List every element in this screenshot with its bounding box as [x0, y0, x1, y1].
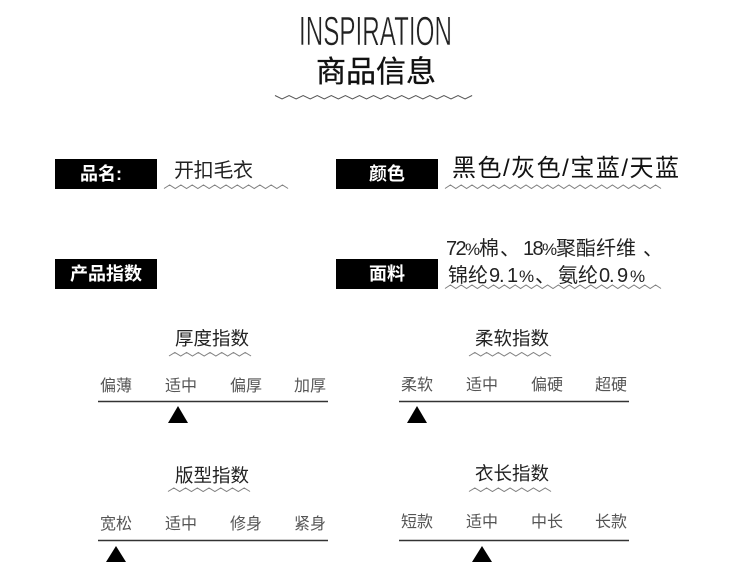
- scale labels: 柔软: [401, 376, 433, 394]
- scale line: [98, 540, 328, 542]
- heading: 商品信息: 商品信息: [316, 56, 436, 89]
- scale labels: 偏硬: [531, 376, 563, 394]
- wavy underline: fabric: [445, 285, 661, 288]
- wavy underline: thickness: [169, 352, 251, 356]
- title wavy underline: [275, 96, 472, 99]
- panel: product name: [55, 159, 288, 189]
- marker: 宽松: [106, 546, 126, 562]
- wavy underline: fit: [168, 488, 250, 492]
- label: 面料: 面料: [369, 264, 405, 284]
- scale labels: 适中: [466, 376, 498, 394]
- wavy underline: softness: [469, 352, 551, 356]
- label: 品名: [55, 159, 157, 189]
- value: fabric line 1: 7: [446, 238, 457, 260]
- scale labels: 长款: [595, 513, 627, 531]
- scale labels: 超硬: [595, 376, 627, 394]
- scale: length: [399, 463, 629, 562]
- value: colour list: 黑色/灰色/宝蓝/天蓝: [452, 155, 679, 182]
- value: fabric line 2: 9: [617, 265, 628, 287]
- value: fabric line 2: 0: [599, 265, 610, 287]
- value: fabric line 1: 8: [532, 238, 544, 260]
- scale line: [399, 400, 629, 402]
- value: fabric line 2: 纶: [578, 264, 598, 287]
- scale labels: 短款: [401, 513, 433, 531]
- panel: colours: [336, 155, 679, 189]
- value: fabric line 2: .: [499, 265, 505, 287]
- marker: 柔软: [407, 406, 427, 423]
- heading: 柔软指数: 柔软指数: [475, 328, 549, 349]
- marker: 适中: [472, 546, 492, 562]
- scale labels: 适中: [165, 515, 197, 533]
- label: 产品指数: 产品指数: [70, 263, 142, 284]
- value: fabric line 1: 棉: [479, 237, 499, 260]
- scale labels: 紧身: [294, 515, 326, 533]
- value: fabric line 1: 2: [456, 238, 467, 260]
- value: fabric line 1: 聚: [556, 238, 576, 260]
- scale labels: 修身: [230, 515, 262, 533]
- value: fabric line 2: 、: [535, 265, 555, 287]
- label: 颜色: 颜色: [369, 164, 405, 184]
- scale: softness: [399, 328, 629, 423]
- scale labels: [100, 377, 326, 395]
- value: fabric line 2: 纶: [468, 264, 488, 287]
- wavy underline: length: [469, 488, 551, 492]
- scale labels: 宽松: [100, 515, 132, 533]
- panel: fabric: [336, 237, 663, 289]
- value: fabric line 2: %: [630, 267, 645, 286]
- heading: 厚度指数: 厚度指数: [175, 328, 249, 349]
- value: fabric line 2: 9: [489, 265, 500, 287]
- marker: 适中: [168, 406, 188, 423]
- label: 颜色: [336, 159, 438, 189]
- heading: 衣长指数: 衣长指数: [475, 463, 549, 484]
- scale line: [399, 540, 629, 542]
- scale labels: 适中: [466, 513, 498, 531]
- wavy underline: colours: [445, 185, 661, 188]
- wavy underline: name: [164, 185, 288, 188]
- scale line: [98, 400, 328, 402]
- value: fabric line 1: 酯: [576, 238, 596, 260]
- scale labels: [401, 376, 627, 394]
- value: fabric line 1: 、: [500, 238, 520, 260]
- value: fabric line 2: 锦: [448, 264, 468, 287]
- value: fabric line 2: 1: [507, 265, 518, 287]
- value: fabric line 2: .: [609, 265, 615, 287]
- label: 品名: 品名:: [80, 164, 122, 184]
- scale labels: [401, 513, 627, 531]
- value: fabric line 2: 氨: [558, 264, 578, 287]
- scale: fit: [98, 465, 328, 562]
- value: fabric line 1: 、: [643, 238, 663, 260]
- label: 产品指数: [55, 259, 157, 289]
- value: fabric line 1: %: [542, 240, 557, 259]
- scale labels: 偏薄: [100, 377, 132, 395]
- value: fabric line 1: 纤: [596, 237, 616, 260]
- value: fabric line 1: 1: [523, 238, 534, 260]
- title: INSPIRATION: INSPIRATION: [299, 8, 452, 54]
- value: 开扣毛衣: 开扣毛衣: [174, 159, 253, 182]
- scale labels: 加厚: [294, 377, 326, 395]
- scale labels: [100, 515, 326, 533]
- heading: 版型指数: 版型指数: [175, 465, 249, 486]
- scale labels: 偏厚: [230, 377, 262, 395]
- label: 面料: [336, 259, 438, 289]
- scale: thickness: [98, 328, 328, 423]
- value: fabric line 1: %: [465, 240, 480, 259]
- value: fabric line 2: %: [519, 267, 534, 286]
- scale labels: 中长: [531, 513, 563, 531]
- scale labels: 适中: [165, 377, 197, 395]
- value: fabric line 1: 维: [616, 237, 636, 260]
